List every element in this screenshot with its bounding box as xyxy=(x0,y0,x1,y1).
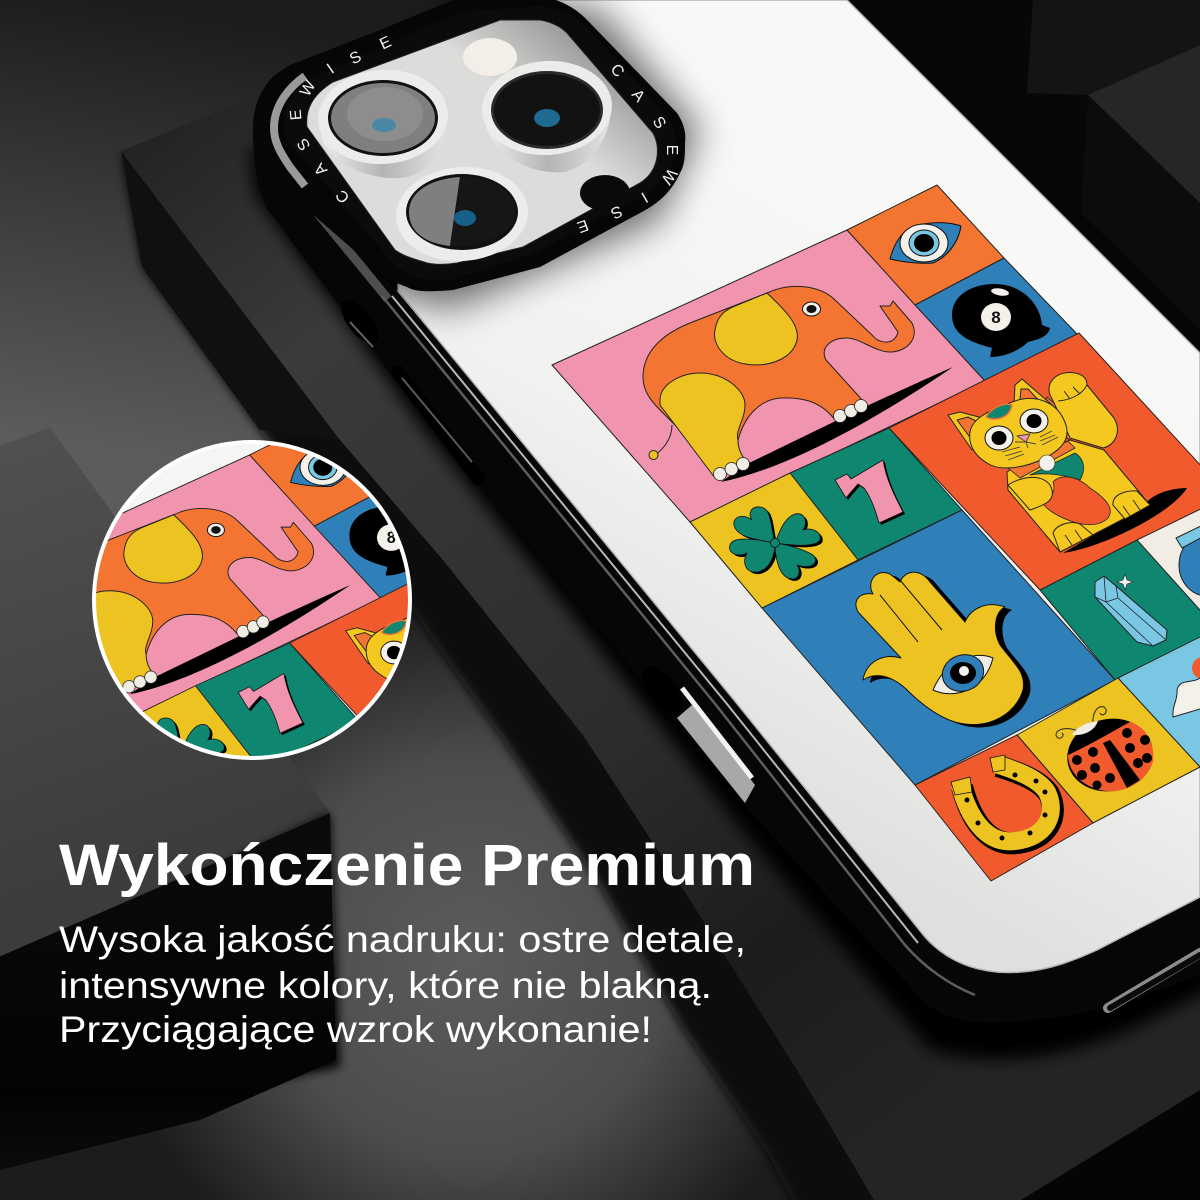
frame side highlights xyxy=(268,70,975,995)
tile: pink elephant xyxy=(552,230,985,522)
elephant ear xyxy=(714,293,797,365)
cat backing square xyxy=(1040,397,1082,440)
cat shadow xyxy=(1063,488,1187,553)
printed artwork grid xyxy=(552,185,1200,881)
clover leaves xyxy=(729,507,820,579)
magnified detail circle xyxy=(92,440,412,760)
USB port xyxy=(1108,953,1200,1008)
camera island soft shadow xyxy=(397,0,720,332)
white back panel xyxy=(398,0,1200,973)
flash xyxy=(463,38,517,76)
cat paws and feet xyxy=(1008,477,1150,552)
hamsa eye xyxy=(933,649,993,697)
cat nose and whiskers xyxy=(1002,431,1058,460)
elephant ground shadow xyxy=(721,367,953,482)
CASEWISE lettering: E xyxy=(663,145,680,155)
CASEWISE lettering: E xyxy=(377,33,394,53)
tile: horseshoe xyxy=(915,735,1093,881)
tile: fish bowl xyxy=(1137,502,1200,610)
tile: evil eye xyxy=(847,185,1004,305)
tile: four-leaf clover xyxy=(690,473,858,608)
cat body xyxy=(1007,440,1150,552)
cat head xyxy=(970,398,1067,468)
elephant rear leg xyxy=(660,373,748,478)
CASEWISE lettering: A xyxy=(628,86,648,106)
cat collar xyxy=(1008,441,1075,478)
CASEWISE lettering: S xyxy=(347,48,364,68)
body text: intensywne kolory, które nie blakną. xyxy=(59,965,712,1006)
side buttons xyxy=(335,294,755,803)
CASEWISE lettering: S xyxy=(649,114,669,132)
cat paw lines xyxy=(1058,385,1087,401)
CASEWISE lettering: E xyxy=(575,216,590,235)
lens two xyxy=(479,57,615,172)
camera island xyxy=(253,0,685,291)
tile: crystal xyxy=(1040,540,1200,680)
tile: eight ball xyxy=(915,258,1078,381)
tile: hamsa hand xyxy=(762,510,1115,785)
hamsa finger lines xyxy=(880,580,942,642)
CASEWISE lettering: W xyxy=(297,77,320,100)
CASEWISE lettering: S xyxy=(294,135,314,153)
lens three xyxy=(393,163,531,265)
ladybug shell xyxy=(1060,711,1160,799)
phone shadow xyxy=(250,100,1200,1060)
phone case xyxy=(253,0,1200,1023)
body text: Przyciągające wzrok wykonanie! xyxy=(59,1009,652,1050)
transparent window over phone xyxy=(307,20,658,264)
CASEWISE lettering: C xyxy=(333,186,353,206)
elephant toes xyxy=(714,400,868,480)
tile: seven xyxy=(790,428,962,560)
elephant body xyxy=(643,286,914,440)
body text: Wysoka jakość nadruku: ostre detale, xyxy=(59,919,746,960)
tile: cloud xyxy=(1118,632,1200,767)
gray gap between frame and ring xyxy=(274,76,305,186)
ring xyxy=(284,6,677,280)
tile: lucky cat xyxy=(889,333,1200,590)
lens one xyxy=(315,66,451,178)
cat belly xyxy=(1043,477,1110,525)
mic hole xyxy=(580,175,630,211)
elephant tail xyxy=(649,425,672,460)
case frame xyxy=(253,0,1200,1023)
CASEWISE lettering: E xyxy=(288,109,305,121)
tile: ladybug xyxy=(1017,678,1200,823)
clover shadow xyxy=(732,509,823,581)
cat forehead mark xyxy=(986,404,1012,419)
cat ears xyxy=(948,379,1052,450)
CASEWISE lettering: I xyxy=(324,61,338,77)
CASEWISE lettering: S xyxy=(608,202,625,222)
title: Wykończenie Premium xyxy=(59,833,755,898)
CASEWISE lettering: I xyxy=(638,188,650,205)
cat bib xyxy=(1030,453,1084,480)
elephant eye xyxy=(802,302,820,316)
island black frame xyxy=(253,0,685,291)
CASEWISE lettering: A xyxy=(311,159,331,179)
cat bell xyxy=(1039,455,1055,471)
CASEWISE lettering xyxy=(288,33,680,235)
hamsa palm xyxy=(856,572,1023,724)
cat eyes xyxy=(985,409,1048,450)
cat raised arm xyxy=(1049,372,1117,448)
CASEWISE lettering: C xyxy=(607,61,627,81)
ladybug antennae xyxy=(1056,707,1106,738)
ladybug spots xyxy=(1072,728,1152,790)
body text xyxy=(59,919,746,1050)
digit seven xyxy=(835,460,903,523)
CASEWISE lettering: W xyxy=(657,165,680,188)
tile: eight ball: 8 xyxy=(991,308,1001,327)
